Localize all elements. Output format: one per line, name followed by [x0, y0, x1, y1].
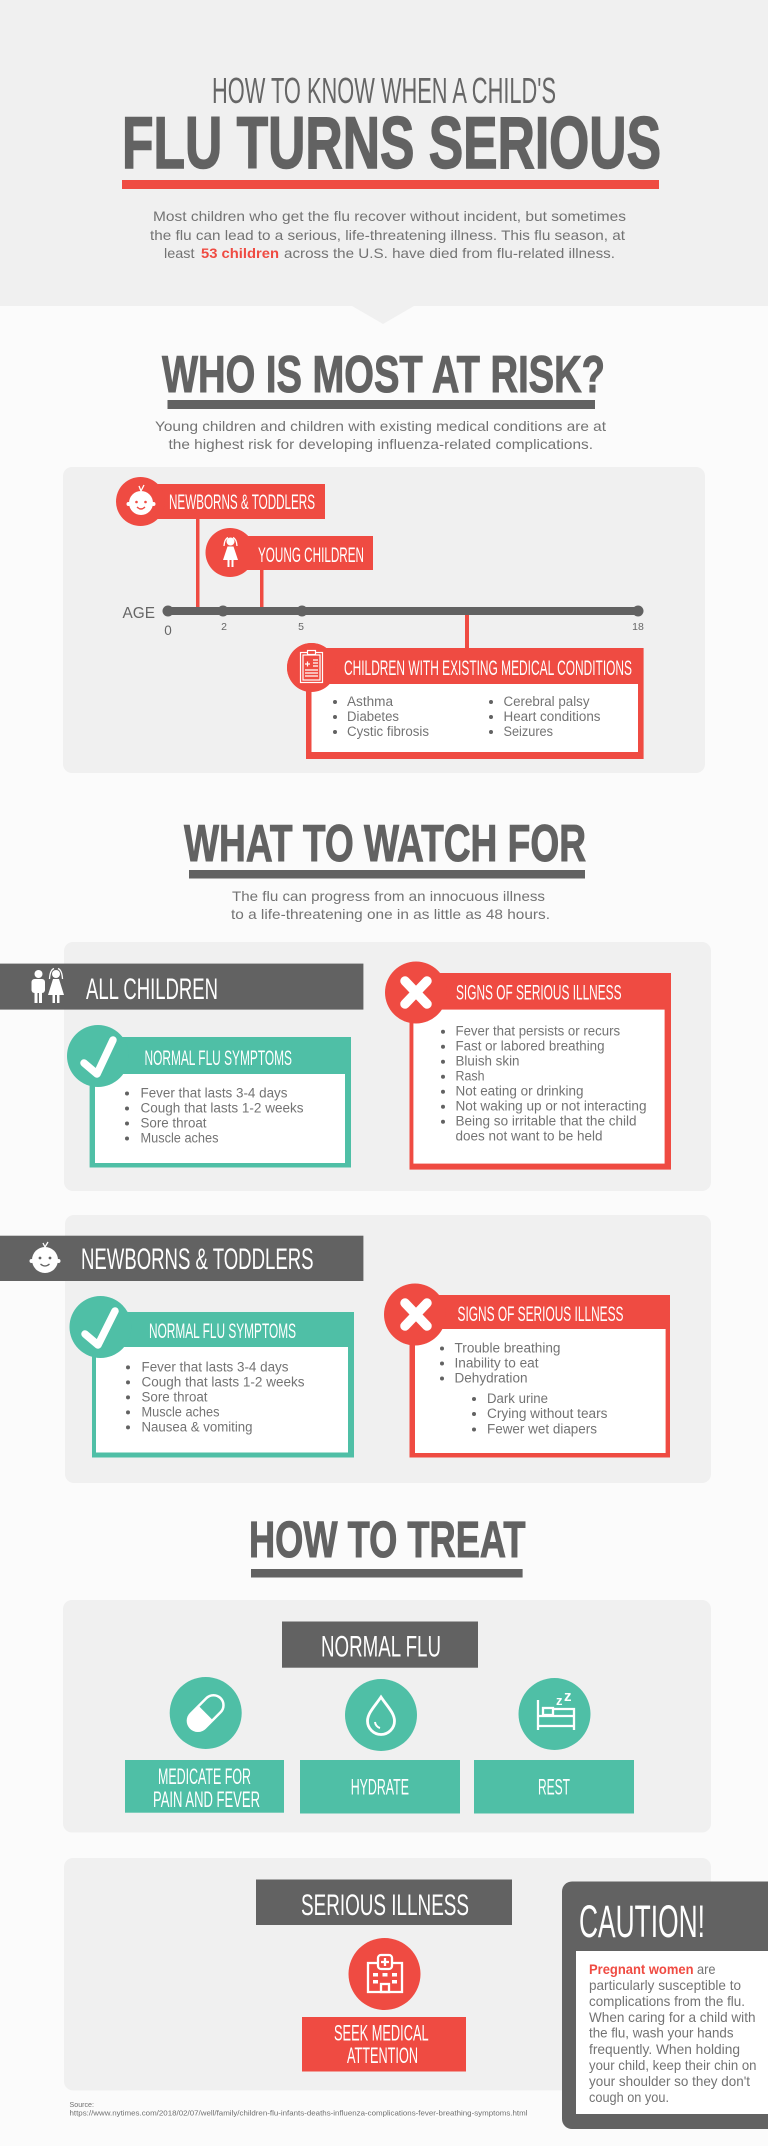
- panel: all children: [0, 942, 711, 1191]
- caution text: Pregnant women: [589, 1961, 694, 1977]
- symptom list: Fever that lasts 3-4 days: [142, 1359, 289, 1374]
- conditions list: [333, 694, 601, 739]
- card: signs of serious illness: SIGNS OF SERIOUS ILLNESS: [456, 982, 622, 1005]
- card: normal flu symptoms: NORMAL FLU SYMPTOMS: [149, 1320, 296, 1343]
- icon: girl: [223, 538, 238, 567]
- caution text: complications from the flu.: [589, 1993, 745, 2009]
- conditions list: Seizures: [504, 724, 553, 739]
- label: young children: [206, 528, 373, 577]
- banner: all children: ALL CHILDREN: [86, 973, 218, 1006]
- title underline: [122, 180, 659, 189]
- warning sign list: Being so irritable that the child: [456, 1114, 636, 1129]
- banner: normal flu: [282, 1622, 478, 1668]
- symptom list: Cough that lasts 1-2 weeks: [142, 1374, 305, 1389]
- card: normal flu symptoms: [67, 1025, 351, 1168]
- warning sign list: Fever that persists or recurs: [456, 1024, 620, 1039]
- title line 1: HOW TO KNOW WHEN A CHILD'S: [212, 70, 556, 111]
- symptom list: Fever that lasts 3-4 days: [140, 1086, 288, 1100]
- risk intro text: Young children and children with existing medical conditions are at: [155, 418, 606, 434]
- box: medicate for pain and fever: MEDICATE FOR: [158, 1764, 251, 1789]
- warning sign list: Fast or labored breathing: [456, 1039, 604, 1054]
- banner: serious illness: [256, 1880, 512, 1925]
- caution text: the flu, wash your hands: [589, 2025, 734, 2041]
- conditions list: Cystic fibrosis: [347, 724, 429, 739]
- watch intro text: The flu can progress from an innocuous illness: [232, 888, 545, 904]
- symptom list: Muscle aches: [140, 1130, 219, 1146]
- panel: serious illness treatment: [64, 1858, 711, 2090]
- watch intro text: [231, 888, 550, 922]
- caution text: your shoulder so they don't: [589, 2073, 750, 2089]
- icon: check mark: [85, 1311, 115, 1345]
- card: signs of serious illness: [385, 962, 671, 1170]
- caution text: [589, 1961, 756, 2105]
- icon: baby face: [30, 1242, 60, 1273]
- risk intro text: the highest risk for developing influenza-related complications.: [168, 436, 593, 452]
- icon: clipboard: [300, 650, 322, 682]
- header panel: [0, 0, 768, 324]
- intro text: 53 children: [201, 245, 279, 261]
- banner: normal flu: NORMAL FLU: [321, 1631, 441, 1664]
- card: signs of serious illness: [384, 1284, 670, 1458]
- banner: all children: [0, 964, 363, 1010]
- intro text: across the U.S. have died from flu-related illness.: [284, 245, 615, 261]
- box: hydrate: [300, 1760, 460, 1814]
- icon: baby face: [126, 485, 156, 515]
- heading: how to treat: [249, 1511, 526, 1578]
- symptom list: Nausea & vomiting: [142, 1419, 252, 1434]
- conditions list: Asthma: [347, 694, 393, 709]
- icon: x mark: [405, 981, 427, 1004]
- intro text: least: [164, 245, 195, 261]
- watch intro text: to a life-threatening one in as little as 48 hours.: [231, 906, 550, 922]
- box: medicate for pain and fever: [125, 1760, 284, 1813]
- box: rest: [474, 1760, 634, 1814]
- box: seek medical attention: [302, 2017, 466, 2072]
- label: young children: YOUNG CHILDREN: [258, 544, 364, 567]
- age axis: 0: [164, 623, 172, 638]
- caution text: your child, keep their chin on: [589, 2057, 756, 2073]
- icon: bed with zzz: [518, 1678, 590, 1750]
- label: newborns and toddlers: NEWBORNS & TODDLERS: [169, 491, 315, 514]
- heading: who is most at risk: [162, 346, 605, 409]
- caution text: frequently. When holding: [589, 2041, 740, 2057]
- conditions list: Diabetes: [347, 709, 399, 724]
- source text: [70, 2100, 528, 2118]
- warning sign list: Dark urine: [487, 1391, 548, 1406]
- symptom list: [126, 1359, 305, 1434]
- warning sign list: Rash: [456, 1069, 484, 1084]
- box: rest: REST: [538, 1775, 570, 1800]
- warning sign list: Not waking up or not interacting: [456, 1099, 646, 1114]
- connector lines: [196, 519, 469, 649]
- symptom list: [125, 1086, 304, 1146]
- warning sign list: [440, 1340, 608, 1436]
- warning sign list: Bluish skin: [456, 1054, 520, 1069]
- icon: pill: [170, 1677, 242, 1749]
- heading: what to watch for: WHAT TO WATCH FOR: [184, 815, 586, 873]
- banner: newborns and toddlers: NEWBORNS & TODDLERS: [81, 1243, 314, 1276]
- warning sign list: Inability to eat: [454, 1356, 539, 1370]
- icon: check mark: [84, 1040, 113, 1074]
- caution text: When caring for a child with: [589, 2009, 756, 2025]
- heading: how to treat: HOW TO TREAT: [249, 1511, 526, 1568]
- label: newborns and toddlers: [116, 477, 325, 526]
- symptom list: Sore throat: [142, 1389, 208, 1404]
- box: seek medical attention: SEEK MEDICAL: [334, 2021, 429, 2046]
- conditions list: Heart conditions: [504, 709, 601, 724]
- panel: age timeline: [63, 467, 705, 773]
- icon: hospital: [348, 1938, 420, 2010]
- card: normal flu symptoms: NORMAL FLU SYMPTOMS: [144, 1047, 292, 1070]
- panel: normal flu treatment: [63, 1600, 711, 1832]
- card: normal flu symptoms: [70, 1296, 354, 1458]
- icon: bed with zzz: z: [556, 1693, 563, 1708]
- intro text: [150, 208, 626, 261]
- heading: what to watch for: [184, 815, 586, 878]
- risk intro text: [155, 418, 606, 452]
- warning sign list: Crying without tears: [487, 1406, 608, 1421]
- label: children with existing medical conditions: [287, 643, 644, 759]
- banner: serious illness: SERIOUS ILLNESS: [301, 1889, 469, 1922]
- intro text: the flu can lead to a serious, life-threatening illness. This flu season, at: [150, 227, 625, 243]
- conditions list: Cerebral palsy: [504, 694, 590, 709]
- caution text: particularly susceptible to: [589, 1977, 741, 1993]
- age axis: [122, 605, 644, 638]
- caution text: are: [697, 1961, 716, 1977]
- icon: boy and girl: [32, 968, 64, 1003]
- caution text: cough on you.: [589, 2089, 669, 2105]
- box: medicate for pain and fever: PAIN AND FEVER: [153, 1787, 260, 1812]
- panel: newborns and toddlers: [0, 1215, 711, 1483]
- warning sign list: [441, 1024, 646, 1144]
- symptom list: Sore throat: [140, 1116, 207, 1130]
- age axis: 2: [221, 621, 227, 633]
- banner: newborns and toddlers: [0, 1236, 363, 1281]
- symptom list: Muscle aches: [142, 1404, 220, 1419]
- age axis: 18: [632, 621, 644, 633]
- warning sign list: does not want to be held: [456, 1129, 602, 1144]
- heading: who is most at risk: WHO IS MOST AT RISK?: [162, 346, 605, 404]
- card: signs of serious illness: SIGNS OF SERIOUS ILLNESS: [458, 1303, 624, 1326]
- icon: bed with zzz: z: [564, 1688, 572, 1705]
- age axis: AGE: [122, 605, 155, 622]
- source text: https://www.nytimes.com/2018/02/07/well/family/children-flu-infants-deaths-influenza-complications-fever-breathing-symptoms.html: [70, 2109, 528, 2118]
- icon: water drop: [345, 1679, 417, 1751]
- age axis: 5: [298, 621, 304, 633]
- warning sign list: Dehydration: [454, 1370, 528, 1386]
- warning sign list: Not eating or drinking: [456, 1084, 584, 1099]
- source text: Source:: [70, 2100, 94, 2109]
- icon: x mark: [405, 1303, 427, 1326]
- warning sign list: Fewer wet diapers: [487, 1422, 597, 1436]
- box: hydrate: HYDRATE: [351, 1775, 409, 1800]
- warning sign list: Trouble breathing: [454, 1340, 560, 1356]
- symptom list: Cough that lasts 1-2 weeks: [140, 1100, 304, 1116]
- box: seek medical attention: ATTENTION: [347, 2043, 418, 2068]
- callout: caution: [562, 1882, 768, 2129]
- intro text: Most children who get the flu recover without incident, but sometimes: [153, 208, 626, 224]
